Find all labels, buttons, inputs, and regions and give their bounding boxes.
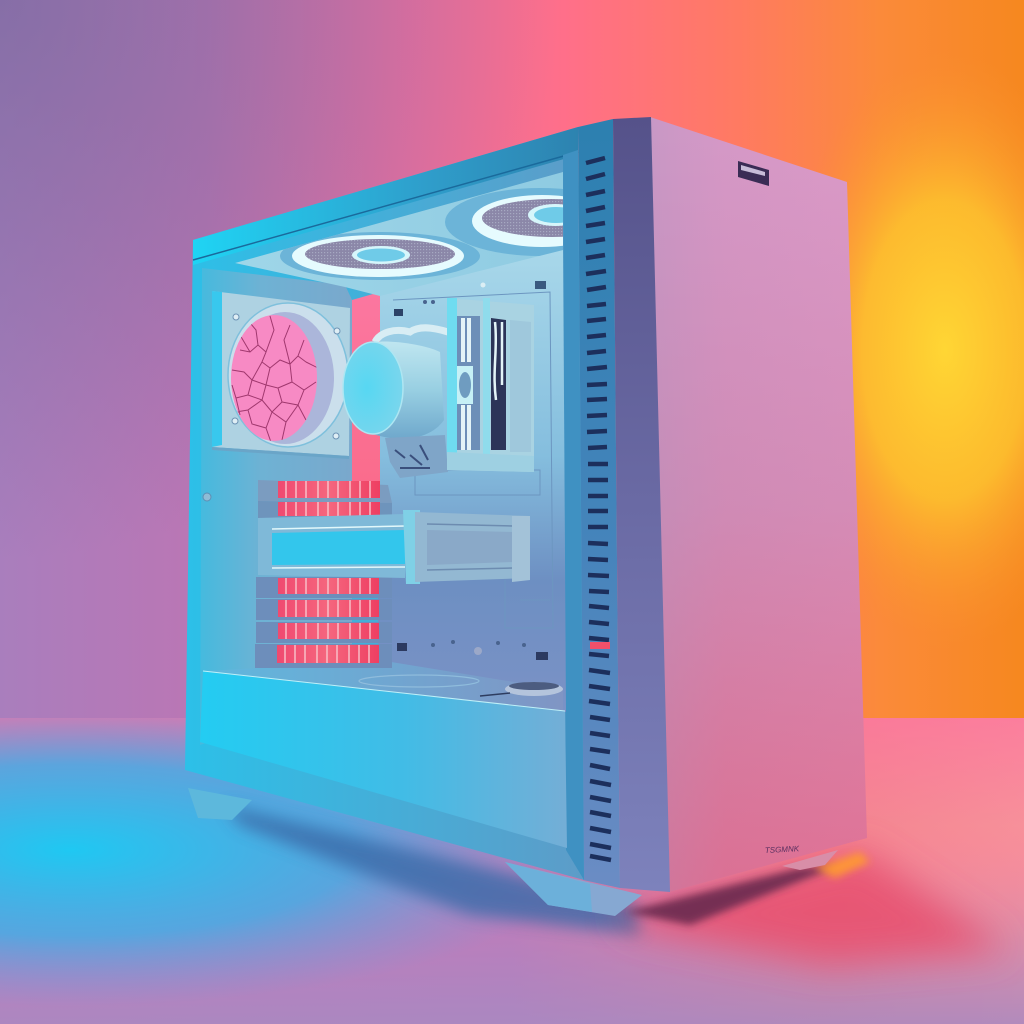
cpu cooler tubes bbox=[375, 328, 448, 342]
pink cracked fan grille bbox=[231, 315, 318, 445]
pink opening behind the fan bbox=[352, 292, 380, 485]
card 6 bbox=[255, 644, 392, 668]
card 5 bbox=[256, 622, 392, 643]
card 2 bbox=[258, 501, 392, 519]
card 3 bbox=[256, 577, 392, 598]
side panel logo: TSGMNK bbox=[765, 844, 800, 855]
top fan left bbox=[280, 232, 480, 280]
case feet bbox=[188, 788, 838, 916]
side panel bbox=[650, 117, 867, 892]
floor shadow: right under the case bbox=[610, 850, 1010, 965]
card stack bbox=[255, 480, 392, 668]
pc case bbox=[185, 117, 867, 916]
tray screws and ports bbox=[394, 281, 548, 660]
psu shroud bbox=[200, 661, 567, 848]
window frame bbox=[185, 127, 584, 880]
radiator frame bbox=[447, 298, 534, 472]
card 4 bbox=[256, 599, 392, 620]
interior back panel bbox=[378, 246, 566, 712]
rear fan panel bbox=[212, 291, 350, 459]
panel screws bbox=[232, 314, 340, 439]
shroud cutout bbox=[359, 675, 479, 687]
card 1 bbox=[258, 480, 392, 503]
ceiling with top fans bbox=[235, 172, 563, 296]
chassis screw bbox=[203, 493, 211, 501]
interior left wall bbox=[200, 268, 352, 745]
fan ring bbox=[228, 303, 348, 447]
motherboard tray outline bbox=[393, 292, 553, 628]
horizontal bracket bbox=[258, 510, 530, 584]
cpu pump cylinder bbox=[343, 342, 448, 478]
top latch slot bbox=[738, 161, 769, 186]
floor shadow: left under the case bbox=[225, 805, 640, 935]
shroud vent part bbox=[480, 682, 563, 696]
background wall bbox=[0, 0, 1024, 720]
floor bbox=[0, 718, 1024, 1024]
dark side edge bbox=[613, 117, 670, 892]
vented front strip bbox=[578, 119, 620, 888]
top fan right bbox=[445, 188, 563, 256]
top frame bar bbox=[193, 127, 578, 265]
